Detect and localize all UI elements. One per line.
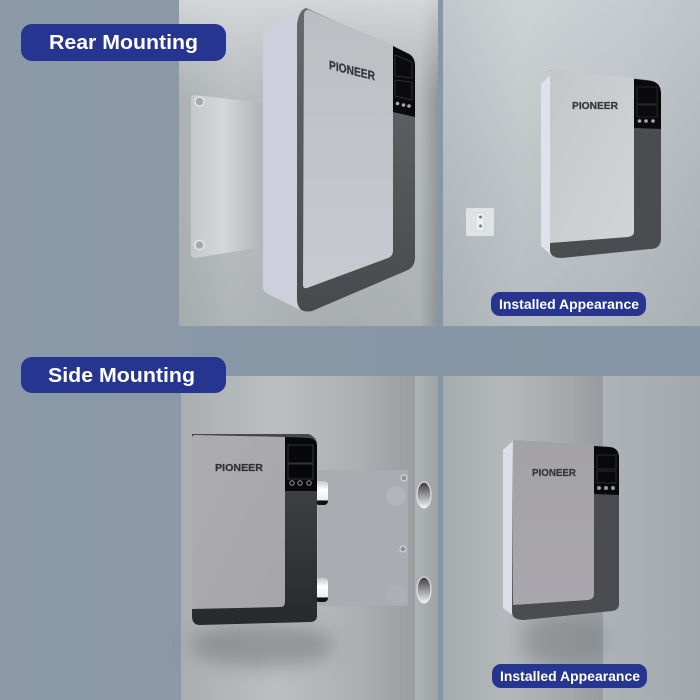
heading: Rear Mounting: [21, 24, 226, 61]
panel: rear mounting exploded view: [179, 0, 438, 326]
wall plate: [318, 470, 408, 606]
panel: side mounting exploded view: [181, 376, 438, 700]
brand label: PIONEER: [329, 58, 375, 83]
battery unit, side mount: [190, 434, 334, 667]
battery unit, side mount installed: [503, 440, 619, 620]
battery unit, rear mount installed: [541, 69, 661, 258]
caption: Installed Appearance, rear: [491, 292, 646, 316]
cable ports: [315, 481, 328, 602]
heading: Rear Mounting: Rear Mounting: [49, 32, 198, 54]
caption: Installed Appearance, side: Installed Appearance: [500, 669, 641, 684]
wall outlet: [466, 208, 494, 236]
caption: Installed Appearance, side: [492, 664, 647, 688]
brand label: PIONEER: [532, 468, 577, 479]
wall plate: [191, 95, 263, 258]
shadow below battery: [520, 614, 604, 666]
caption: Installed Appearance, rear: Installed Appearance: [499, 297, 640, 312]
brand label: PIONEER: [215, 462, 263, 474]
brand label: PIONEER: [572, 100, 618, 112]
battery unit, rear mount: [263, 8, 415, 312]
cable holes in wall: [417, 482, 431, 603]
panel: rear mounting installed view: [443, 0, 700, 326]
heading: Side Mounting: Side Mounting: [48, 365, 195, 387]
panel: side mounting installed view: [443, 376, 700, 700]
heading: Side Mounting: [21, 357, 226, 393]
